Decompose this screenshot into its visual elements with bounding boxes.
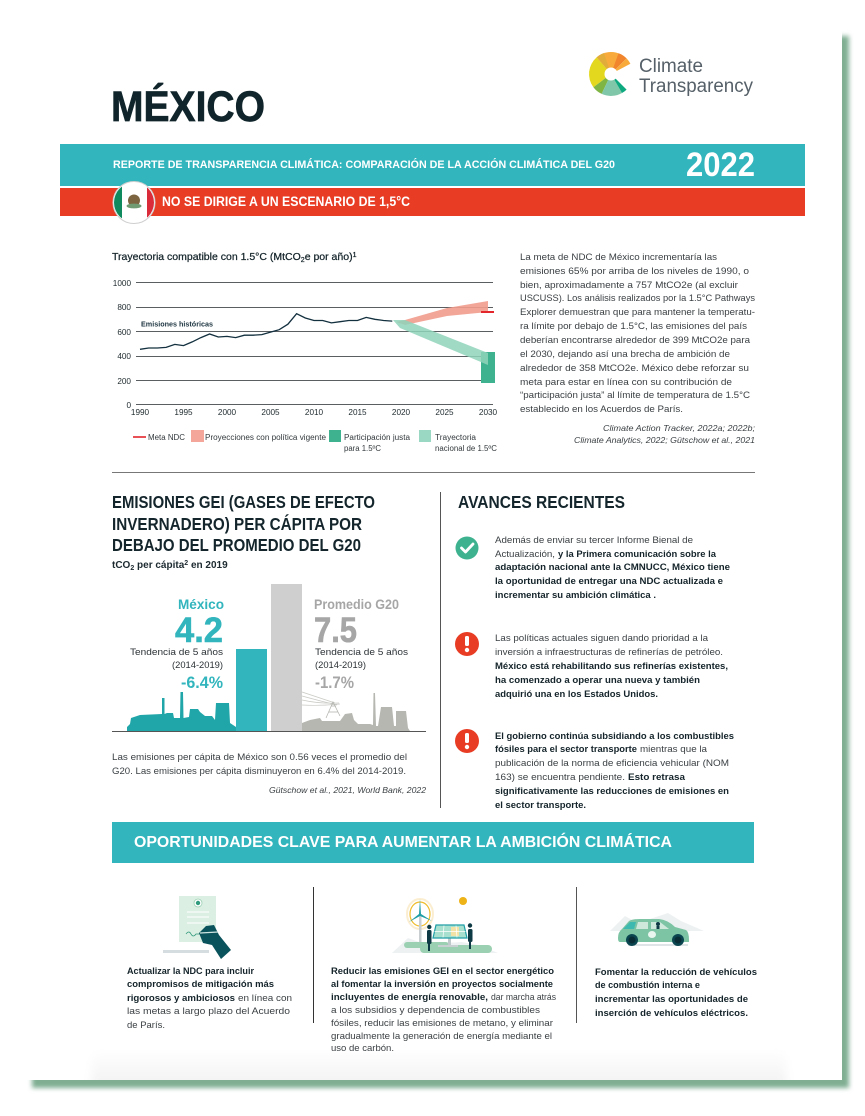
text block: progress 3: mientras que la (640, 743, 708, 754)
icon: Mexican flag (112, 181, 156, 224)
text block: update NDC: Actualizar la NDC para incluir (127, 965, 254, 976)
chart legend: Proyecciones con política vigente (205, 433, 327, 442)
text block: progress 1: y la Primera comunicación sobre la (558, 548, 717, 559)
line chart: emissions trajectory: 200 (117, 377, 131, 386)
text block: NDC analysis: USCUSS). Los análisis realizados por la 1.5°C Pathways (520, 292, 755, 303)
text block: progress 2 (495, 632, 728, 699)
banner: rating (60, 188, 805, 216)
text block: progress 2: ha comenzado a operar una nueva y también (495, 674, 700, 685)
text block: per capita summary: Las emisiones per cápita de México son 0.56 veces el promedio del (112, 751, 407, 762)
text block: reduce energy emissions: al fomentar la inversión en proyectos socialmente (331, 978, 553, 989)
stats: G20 average: -1.7% (315, 674, 354, 692)
bar: G20 (271, 584, 302, 731)
text block: NDC analysis: el 2030, dejando así una brecha de ambición de (520, 348, 730, 359)
chart legend: Participación justa (344, 433, 411, 442)
icon: warning 1 (455, 632, 479, 656)
text block: electric vehicles: Fomentar la reducción de vehículos (595, 966, 757, 977)
title: MÉXICO (111, 83, 265, 131)
chart legend: Trayectoria (435, 433, 477, 442)
icon: electric car (610, 913, 704, 946)
banner: report title: 2022 (686, 146, 755, 184)
text block: progress 1: Además de enviar su tercer Informe Bienal de (495, 534, 693, 545)
text block: NDC analysis (520, 251, 755, 414)
line chart: emissions trajectory: Emisiones históricas (141, 320, 213, 328)
chart legend: nacional de 1.5ºC (435, 444, 497, 453)
line chart: emissions trajectory: 2015 (348, 408, 367, 417)
line chart: emissions trajectory: 0 (126, 401, 131, 410)
stats: G20 average: (2014-2019) (315, 659, 366, 670)
line chart: emissions trajectory: 600 (117, 328, 131, 337)
citation: NDC analysis: Climate Action Tracker, 2022a; 2022b; (603, 423, 756, 433)
citation: per capita: Gütschow et al., 2021, World Bank, 2022 (269, 785, 426, 795)
citation: NDC analysis (574, 423, 756, 445)
line chart: emissions trajectory: 800 (117, 303, 131, 312)
text block: reduce energy emissions: uso de carbón. (331, 1042, 394, 1053)
text block: per capita summary (112, 751, 407, 776)
stats: Mexico: México (178, 596, 224, 612)
chart legend (133, 430, 497, 453)
chart title: 1 (353, 252, 357, 259)
text block: progress 3: el sector transporte. (495, 799, 586, 810)
stats: Mexico: 4.2 (175, 611, 223, 650)
chart title: 2 (301, 257, 305, 264)
text block: progress 3: Esto retrasa (628, 771, 686, 782)
text block: reduce energy emissions: incluyentes de energía renovable, (331, 991, 488, 1002)
text block: progress 3: significativamente las reducciones de emisiones en (495, 785, 729, 796)
text block: update NDC: en línea con (238, 992, 292, 1003)
text block: electric vehicles: incrementar las oportunidades de (595, 993, 748, 1004)
text block: NDC analysis: ra límite por debajo de 1.5°C, las emisiones del país (520, 320, 747, 331)
heading: per capita emissions (112, 492, 375, 555)
text block: reduce energy emissions: Reducir las emisiones GEI en el sector energético (331, 965, 554, 976)
text block: electric vehicles (595, 966, 757, 1018)
text block: NDC analysis: Explorer demuestran que para mantener la temperatu- (520, 306, 755, 317)
heading: per capita emissions: EMISIONES GEI (GASES DE EFECTO (112, 492, 375, 512)
text block: NDC analysis: “participación justa” al límite de temperatura de 1.5°C (520, 389, 750, 400)
text block: reduce energy emissions: fósiles, reducir las emisiones de metano, y eliminar (331, 1017, 553, 1028)
subheading: unit: 2 (184, 560, 188, 567)
citation: NDC analysis: Climate Analytics, 2022; Gütschow et al., 2021 (574, 435, 755, 445)
stats: Mexico: -6.4% (181, 674, 223, 692)
banner: report title: REPORTE DE TRANSPARENCIA CLIMÁTICA: COMPARACIÓN DE LA ACCIÓN CLIMÁTICA DEL G20 (113, 158, 615, 171)
text block: reduce energy emissions: dar marcha atrás (491, 991, 556, 1002)
text block: progress 3: El gobierno continúa subsidiando a los combustibles (495, 730, 734, 741)
text block: progress 2: inversión a infraestructuras de refinerías de petróleo. (495, 646, 723, 657)
text block: progress 3 (495, 730, 734, 810)
text block: progress 1: incrementar su ambición climática . (495, 589, 656, 600)
line chart: emissions trajectory: 400 (117, 352, 131, 361)
line chart: emissions trajectory: 2000 (218, 408, 237, 417)
stats: Mexico (130, 596, 224, 692)
text block: NDC analysis: emisiones 65% por arriba de los niveles de 1990, o (520, 265, 749, 276)
logo: Climate Transparency: Climate (639, 56, 703, 77)
line chart: emissions trajectory: 1995 (174, 408, 193, 417)
line chart: emissions trajectory: 2010 (305, 408, 324, 417)
line chart: emissions trajectory: 2025 (435, 408, 454, 417)
stats: G20 average: Tendencia de 5 años (315, 646, 408, 657)
subheading: unit: en 2019 (188, 560, 228, 571)
stats: G20 average: 7.5 (314, 611, 357, 650)
power lines (302, 692, 340, 718)
text block: reduce energy emissions: gradualmente la generación de energía mediante el (331, 1030, 552, 1041)
subheading: unit: per cápita (134, 560, 185, 571)
icon: check (456, 536, 478, 560)
bar chart: per capita comparison (112, 584, 426, 732)
subheading: unit: tCO (112, 560, 130, 571)
text block: progress 3: publicación de la norma de eficiencia vehicular (NOM (495, 757, 729, 768)
icon: wind turbine and solar panel (392, 897, 498, 953)
chart title: e por año) (305, 251, 353, 263)
bar: Mexico (236, 649, 267, 731)
icon: warning 2 (455, 729, 479, 753)
line chart: emissions trajectory: 2005 (261, 408, 280, 417)
text block: NDC analysis: alrededor de 358 MtCO2e. México debe reforzar su (520, 362, 749, 373)
stats: G20 average (314, 596, 408, 692)
text block: progress 3: fósiles para el sector transporte (495, 743, 637, 754)
text block: progress 1: la oportunidad de entregar una NDC actualizada e (495, 575, 723, 586)
logo: Climate Transparency (589, 52, 753, 97)
text block: progress 2: adquirió una en los Estados Unidos. (495, 688, 658, 699)
text block: update NDC: compromisos de mitigación más (127, 978, 274, 989)
icon: signing document (163, 896, 231, 959)
heading: per capita emissions: DEBAJO DEL PROMEDIO DEL G20 (112, 535, 361, 555)
text block: reduce energy emissions: a los subsidios y dependencia de combustibles (331, 1004, 540, 1015)
text block: progress 1: adaptación nacional ante la CMNUCC, México tiene (495, 561, 730, 572)
text block: NDC analysis: establecido en los Acuerdos de París. (520, 403, 683, 414)
skyline: G20 (302, 693, 410, 731)
skyline: Mexico (127, 692, 236, 731)
text block: electric vehicles: inserción de vehículos eléctricos. (595, 1007, 748, 1018)
banner: key opportunities: OPORTUNIDADES CLAVE PARA AUMENTAR LA AMBICIÓN CLIMÁTICA (134, 832, 672, 851)
text block: NDC analysis: meta para estar en línea con su contribución de (520, 376, 732, 387)
text block: progress 1 (495, 534, 730, 600)
logo: Climate Transparency: Transparency (639, 76, 753, 97)
text block: update NDC (127, 965, 292, 1030)
line chart: emissions trajectory: 1000 (113, 279, 131, 288)
heading: per capita emissions: INVERNADERO) PER CÁPITA POR (112, 513, 362, 534)
banner: report title (60, 144, 805, 186)
chart legend: para 1.5ºC (344, 444, 381, 453)
line chart: emissions trajectory: 2020 (392, 408, 411, 417)
banner: key opportunities (112, 822, 754, 863)
stats: Mexico: Tendencia de 5 años (130, 646, 223, 657)
text block: update NDC: las metas a largo plazo del Acuerdo (127, 1005, 290, 1016)
stats: G20 average: Promedio G20 (314, 596, 399, 612)
heading: recent progress: AVANCES RECIENTES (458, 492, 625, 512)
banner: rating: NO SE DIRIGE A UN ESCENARIO DE 1,5°C (162, 194, 410, 209)
text block: NDC analysis: deberían encontrarse alrededor de 399 MtCO2e para (520, 334, 751, 345)
text block: per capita summary: G20. Las emisiones per cápita disminuyeron en 6.4% del 2014-2019. (112, 765, 406, 776)
text block: progress 2: Las políticas actuales siguen dando prioridad a la (495, 632, 709, 643)
text block: progress 2: México está rehabilitando sus refinerías existentes, (495, 660, 728, 671)
chart legend: Meta NDC (148, 433, 185, 442)
subheading: unit: 2 (130, 565, 134, 572)
line chart: emissions trajectory: 2030 (479, 408, 498, 417)
text block: progress 3: 163) se encuentra pendiente. (495, 771, 625, 782)
line chart: emissions trajectory (113, 279, 498, 417)
chart title: Trayectoria compatible con 1.5°C (MtCO (112, 251, 301, 263)
text block: update NDC: rigorosos y ambiciosos (127, 992, 235, 1003)
text block: electric vehicles: de combustión interna e (595, 979, 700, 990)
text block: NDC analysis: bien, aproximadamente a 757 MtCO2e (al excluir (520, 279, 738, 290)
text block: NDC analysis: La meta de NDC de México incrementaría las (520, 251, 717, 262)
text block: update NDC: de París. (127, 1019, 165, 1030)
text block: progress 1: Actualización, (495, 548, 555, 559)
stats: Mexico: (2014-2019) (172, 659, 223, 670)
text block: reduce energy emissions (331, 965, 556, 1053)
line chart: emissions trajectory: 1990 (131, 408, 150, 417)
